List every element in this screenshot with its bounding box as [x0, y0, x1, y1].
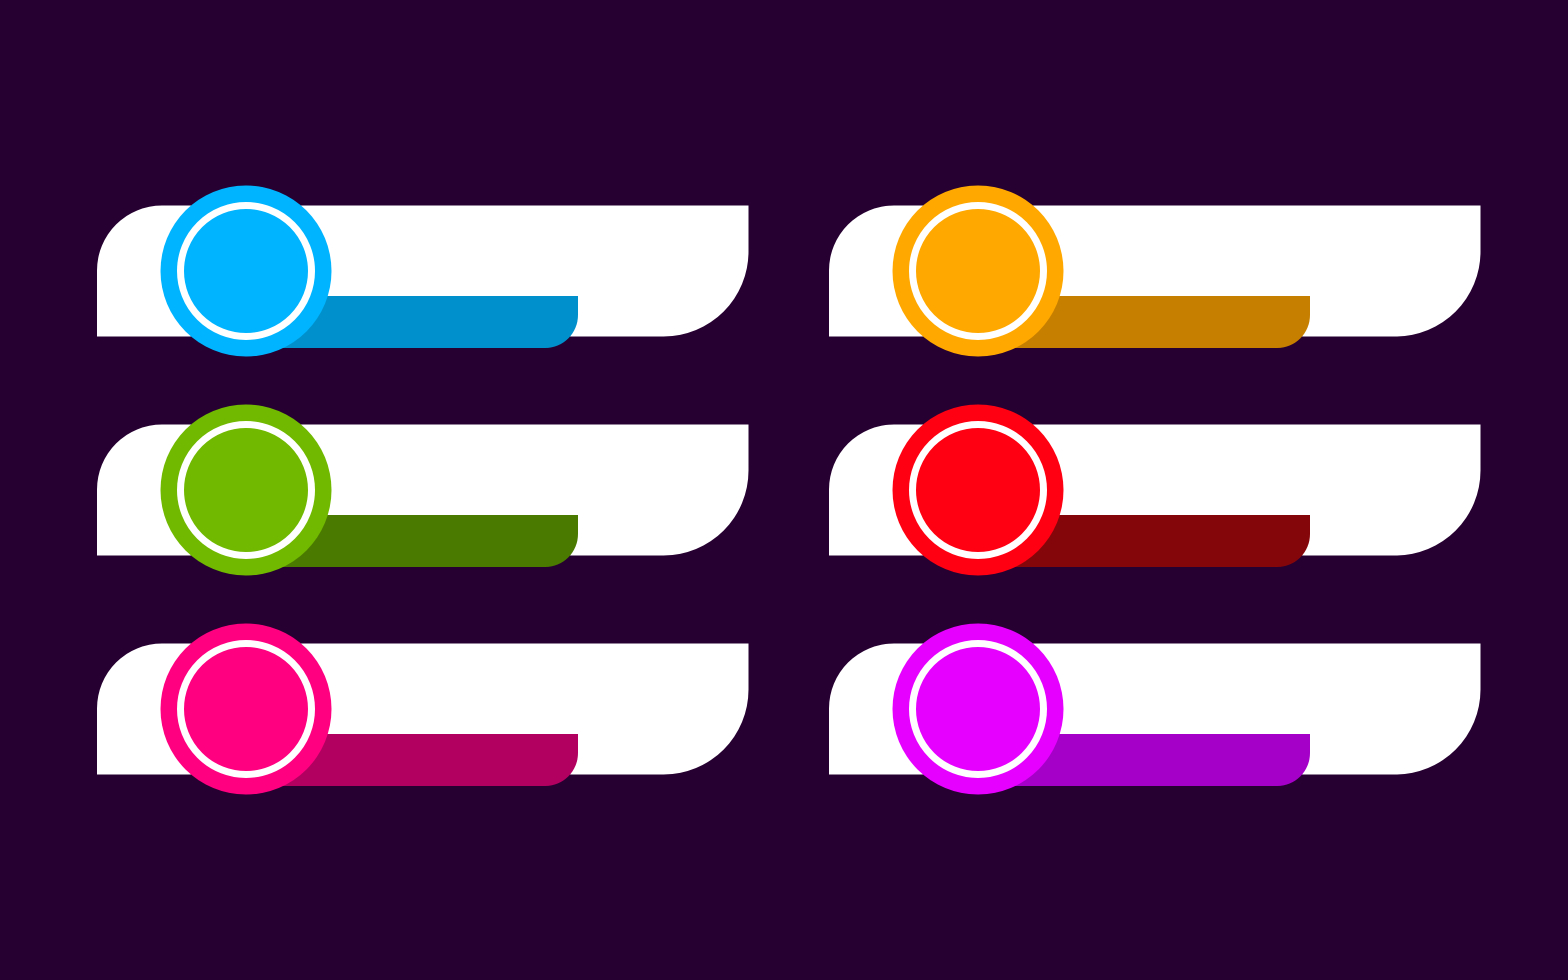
green circle badge: [160, 404, 332, 576]
panel: red banner: [829, 404, 1480, 576]
orange circle badge: [892, 186, 1064, 356]
pink circle badge: [160, 624, 332, 794]
panel: orange banner: [829, 186, 1480, 356]
dark pink accent bar: [246, 734, 578, 786]
magenta circle badge: [892, 624, 1064, 794]
red circle badge: [892, 404, 1064, 576]
purple accent bar: [978, 734, 1310, 786]
panel: pink banner: [97, 624, 748, 794]
panel: blue banner: [97, 186, 748, 356]
blue accent bar: [246, 296, 578, 348]
orange accent bar: [978, 296, 1310, 348]
panel: magenta banner: [829, 624, 1480, 794]
dark red accent bar: [978, 515, 1310, 567]
panel: green banner: [97, 404, 748, 576]
green accent bar: [246, 515, 578, 567]
blue circle badge: [160, 186, 332, 356]
